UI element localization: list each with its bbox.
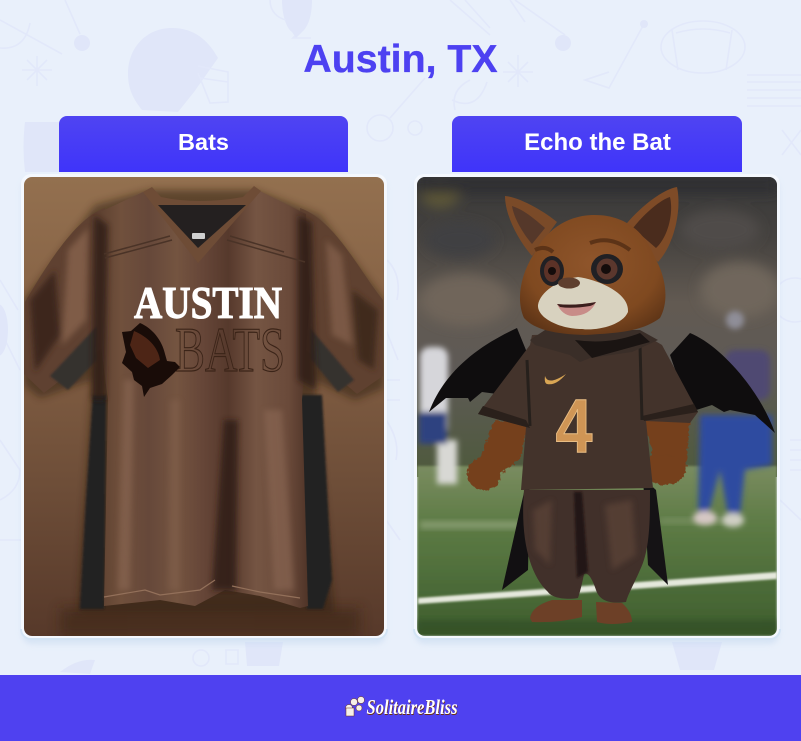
- icon: left side shapes: [0, 280, 22, 540]
- shoes: [530, 600, 582, 622]
- header tab: Echo the Bat: [452, 116, 742, 172]
- icon: lower left shapes: [367, 78, 487, 141]
- icon: right side shapes: [773, 130, 801, 520]
- panel: mascot image: [414, 174, 780, 644]
- footer logo: SolitaireBliss: [346, 695, 458, 720]
- icon: stripe block: [747, 75, 801, 106]
- jersey number 4: 4: [556, 384, 592, 469]
- faint yard line: [420, 521, 520, 529]
- shoulder seams: [104, 236, 305, 262]
- arms and hands: [467, 418, 690, 490]
- stadium crowd background: [417, 176, 780, 477]
- background players: [419, 311, 772, 527]
- footer bar: [0, 675, 801, 741]
- left sleeve: [24, 214, 94, 392]
- right sleeve: [300, 208, 383, 394]
- title: Austin, TX: [303, 37, 498, 81]
- sleeve folds: [30, 228, 378, 372]
- sleeve black panels: [50, 326, 354, 392]
- icon: football outline: [661, 21, 745, 73]
- icon: football helmet: [128, 28, 228, 112]
- pants: [523, 490, 650, 603]
- nose: [558, 278, 580, 288]
- header tab: Bats: [59, 116, 348, 172]
- header tab: Echo the Bat: Echo the Bat: [524, 129, 671, 156]
- mouth: [557, 302, 596, 316]
- icon: shadow blob behind left header: [24, 122, 59, 172]
- grass field: [417, 466, 777, 636]
- jersey wordmark BATS: BATS: [175, 314, 285, 385]
- muzzle: [538, 277, 628, 329]
- fold highlights: [118, 380, 294, 590]
- jersey body: [95, 190, 310, 608]
- mascot head: [520, 215, 665, 335]
- icon: bottom shapes: [60, 642, 722, 674]
- side black panels: [80, 395, 332, 609]
- icon: trophy: [270, 0, 312, 38]
- panel: jersey image: [21, 174, 387, 644]
- fold shadows: [92, 215, 316, 590]
- icon: whistle line: [0, 0, 90, 54]
- icon: pin line: [515, 0, 648, 88]
- mascot jersey: [478, 332, 698, 490]
- mascot ears: [505, 187, 678, 262]
- jersey wordmark AUSTIN: AUSTIN: [134, 277, 282, 328]
- icon: bat logo: [122, 323, 180, 397]
- wordmark: SolitaireBliss: [366, 695, 458, 719]
- eyebrows: [535, 240, 630, 252]
- wordmark shadow: SolitaireBliss: [367, 696, 458, 720]
- icon: swoosh: [545, 374, 566, 384]
- hem stitch: [104, 580, 300, 598]
- header tab: Bats: Bats: [178, 129, 229, 155]
- mascot collar: [530, 330, 658, 362]
- icon: cone: [450, 0, 525, 35]
- white field line: [418, 572, 777, 604]
- eyes: [540, 254, 623, 286]
- cape: [502, 488, 530, 590]
- icon: card spades: [346, 696, 364, 716]
- bat wings: [429, 328, 775, 433]
- collar and neck: [143, 186, 261, 263]
- jersey shadow: [24, 190, 384, 612]
- icon: star marks: [22, 55, 533, 87]
- icon: middle gap shapes: [386, 260, 400, 540]
